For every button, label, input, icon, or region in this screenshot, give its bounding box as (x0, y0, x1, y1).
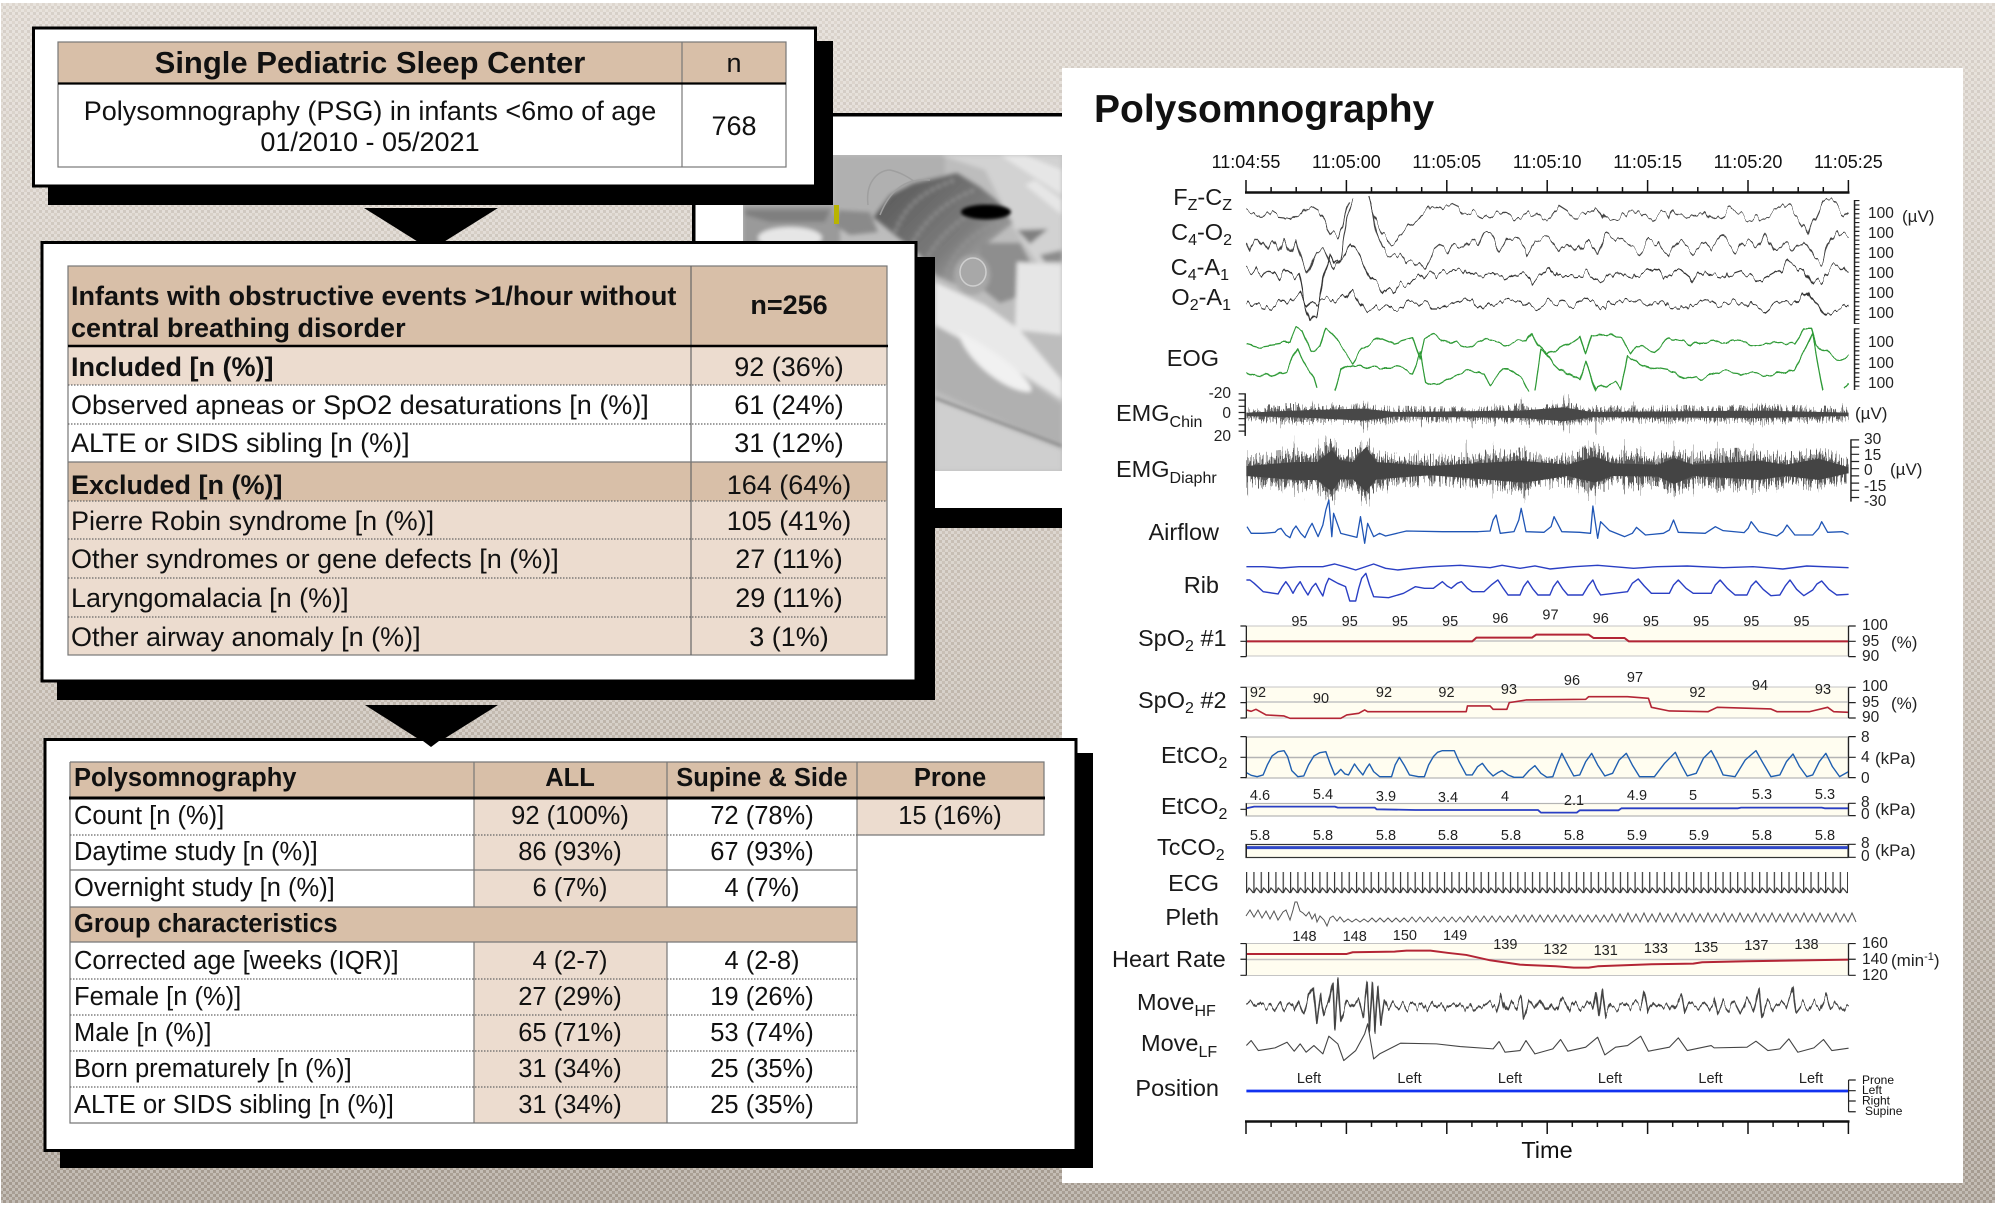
channel labels: EEG: Z (1188, 197, 1198, 214)
row: other airway anomaly: 3 (1%) (749, 622, 829, 652)
channel: EtCO2 trend: 3.4 (1438, 790, 1458, 806)
channel: Heart Rate: 160 (1862, 935, 1888, 952)
row: observed apneas: Observed apneas or SpO2 desaturations [n (%)] (71, 390, 649, 420)
trace: Fz-Cz recovery (1369, 200, 1849, 243)
channel: TcCO2 trend: 5.9 (1627, 828, 1647, 844)
channel: EtCO2 trend: (kPa) (1875, 800, 1916, 819)
channel: EtCO2 trend: 4.9 (1627, 788, 1647, 804)
channel: Position: Position (1135, 1075, 1219, 1101)
table header (74, 764, 986, 792)
row: laryngomalacia (71, 583, 843, 613)
channel: SpO2 #1: 96 (1593, 611, 1609, 627)
channel: SpO2 #1: 95 (1643, 614, 1659, 630)
channel: EtCO2 trend (1161, 787, 1916, 823)
channel: EMG chin label and scale: Chin (1170, 414, 1202, 431)
channel labels: EEG (1171, 184, 1232, 314)
trace: EtCO2 waveform (1246, 751, 1849, 777)
row: male: Male [n (%)] (74, 1019, 211, 1047)
channel: EMG chin label and scale: -20 (1209, 385, 1231, 402)
trace: C4-A1 (1246, 245, 1849, 320)
traces: heart rate, movement, position (1240, 944, 1856, 1112)
trace: EtCO2 trend (1246, 807, 1849, 813)
channel: SpO2 #1: 2 (1185, 638, 1194, 655)
row: male: 65 (71%) (518, 1019, 622, 1047)
table body: 768 (711, 111, 757, 141)
panel: polysomnography results (45, 735, 1093, 1168)
channel: SpO2 #2: 95 (1862, 694, 1879, 711)
channel: TcCO2 trend: 5.8 (1752, 828, 1772, 844)
scale: EEG and EOG ticks (1242, 200, 1857, 502)
channel: EMG chin label and scale: EMG (1116, 400, 1170, 426)
row: corrected age (74, 947, 800, 975)
channel: ECG (1168, 870, 1848, 896)
panels: SpO2, EtCO2, TcCO2 backgrounds (1246, 626, 1848, 976)
trace: EOG lower right (1535, 333, 1823, 390)
channel: SpO2 #2 (1138, 670, 1917, 726)
channel: EtCO2 trend: 8 (1861, 794, 1870, 811)
channel: TcCO2 trend: 5.8 (1250, 828, 1270, 844)
channel: Move labels: LF (1198, 1044, 1217, 1061)
row: observed apneas: 61 (24%) (734, 390, 844, 420)
trace: EOG end (1844, 383, 1849, 388)
channel: Heart Rate (1112, 928, 1940, 984)
channel: Heart Rate: 148 (1343, 929, 1367, 945)
row: ALTE or SIDS sibling: ALTE or SIDS sibling [n (%)] (71, 428, 410, 458)
channel: SpO2 #1: 95 (1862, 633, 1879, 650)
trace group: EOG channels (1246, 328, 1849, 390)
channel: EtCO2 waveform: EtCO (1161, 742, 1218, 768)
channel: Heart Rate: 149 (1443, 928, 1467, 944)
row: male (74, 1019, 814, 1047)
time axis: top: 11:05:10 (1513, 152, 1582, 172)
channel: EtCO2 trend: 0 (1861, 806, 1870, 823)
scale labels: EEG microvolts: 100 (1868, 205, 1894, 222)
channel: SpO2 #2: 92 (1438, 685, 1455, 701)
trace: EOG upper (1246, 328, 1849, 362)
channel: Airflow and Rib labels (1148, 519, 1220, 598)
row: excluded: Excluded [n (%)] (71, 470, 283, 500)
trace: C4-O2 (1246, 200, 1353, 275)
channel: TcCO2 trend: 5.8 (1564, 828, 1584, 844)
table cell fills (68, 266, 887, 655)
channel: SpO2 #1: 97 (1542, 608, 1559, 624)
row: male: 53 (74%) (710, 1019, 814, 1047)
row: other airway anomaly: Other airway anomaly [n (%)] (71, 622, 421, 652)
channel: Position: Prone (1862, 1073, 1894, 1087)
channel: Position: Left (1297, 1071, 1321, 1087)
channel: SpO2 #1: #1 (1194, 625, 1227, 651)
channel: Position: Left (1698, 1071, 1723, 1087)
channel: EtCO2 trend: 5.3 (1815, 787, 1835, 803)
channel: Position (1135, 1071, 1903, 1118)
channel labels: EEG: -A (1199, 284, 1222, 310)
channel: Heart Rate: 139 (1493, 937, 1517, 953)
trace: Airflow (1247, 500, 1849, 543)
panel: single pediatric sleep center (34, 28, 833, 205)
channel: EMG diaphragm label and scale (1116, 431, 1922, 510)
scale labels: EEG microvolts: 100 (1868, 285, 1894, 302)
row: overnight study: Overnight study [n (%)] (74, 874, 335, 902)
channel labels: EEG: F (1173, 184, 1188, 210)
channel: TcCO2 trend: 8 (1861, 835, 1870, 852)
channel: EtCO2 trend: 5 (1689, 788, 1697, 804)
channel: SpO2 #2: (%) (1891, 694, 1917, 713)
row: ALTE or SIDS sibling: 31 (12%) (734, 428, 844, 458)
table body: 01/2010 - 05/2021 (260, 127, 480, 157)
time axis: top: 11:05:20 (1714, 152, 1782, 172)
channel: Heart Rate: -1 (1924, 951, 1934, 963)
channel: SpO2 #1: 95 (1392, 614, 1408, 630)
channel labels: EEG: -O (1197, 219, 1223, 245)
channel: SpO2 #1: SpO (1138, 625, 1185, 651)
channel: EtCO2 trend: 4 (1501, 789, 1509, 805)
row: included: 92 (36%) (734, 352, 844, 382)
scale labels: EEG microvolts: 100 (1868, 245, 1894, 262)
row: ALTE or SIDS sibling (74, 1091, 814, 1119)
row: daytime study: Daytime study [n (%)] (74, 838, 318, 866)
row: overnight study: 6 (7%) (532, 874, 608, 902)
row: group characteristics: Group characteristics (74, 910, 338, 938)
channel: EMG diaphragm label and scale: 0 (1864, 462, 1873, 479)
channel: Heart Rate: 131 (1594, 943, 1618, 959)
channel labels: EEG: O (1171, 284, 1190, 310)
channel: EtCO2 waveform: 0 (1861, 770, 1870, 787)
trace: movement low frequency (1246, 1024, 1849, 1061)
channel labels: EEG: 1 (1220, 267, 1229, 284)
scale ticks: heart rate and position (1240, 944, 1856, 1112)
channel: Heart Rate: 135 (1694, 940, 1718, 956)
table header: n (726, 48, 742, 78)
row: Pierre Robin syndrome (71, 506, 851, 536)
channel: Position: Right (1862, 1094, 1891, 1108)
panel: slide with infant photograph (692, 113, 1062, 528)
channel: EOG label and scale: 100 (1868, 334, 1894, 351)
channel: EtCO2 waveform (1161, 729, 1916, 787)
time axis: top: 11:04:55 (1212, 152, 1280, 172)
channel: SpO2 #2: #2 (1194, 687, 1227, 713)
row: corrected age: 4 (2-8) (724, 947, 800, 975)
channel: TcCO2 trend: 5.8 (1376, 828, 1396, 844)
channel: EMG diaphragm label and scale: (µV) (1890, 460, 1922, 479)
table header: central breathing disorder (71, 313, 406, 343)
channel: Heart Rate: Heart Rate (1112, 946, 1226, 972)
channel: EOG label and scale: 100 (1868, 355, 1894, 372)
channel: EMG diaphragm label and scale: EMG (1116, 456, 1170, 482)
channel: EMG diaphragm label and scale: Diaphr (1170, 470, 1217, 487)
channel: EOG label and scale: EOG (1167, 345, 1219, 371)
row: overnight study (74, 874, 800, 902)
table lines (68, 266, 888, 655)
trace: movement high frequency (1246, 980, 1849, 1030)
channel: EtCO2 waveform: (kPa) (1875, 749, 1916, 768)
channel: TcCO2 trend: (kPa) (1875, 841, 1916, 860)
row: ALTE or SIDS sibling: 31 (34%) (518, 1091, 622, 1119)
channel: Heart Rate: 133 (1644, 941, 1668, 957)
channel: Position: Left (1397, 1071, 1422, 1087)
row: count: 15 (16%) (898, 802, 1002, 830)
channel: Heart Rate: ) (1934, 951, 1940, 970)
row: ALTE or SIDS sibling: 25 (35%) (710, 1091, 814, 1119)
channel: SpO2 #1: (%) (1891, 633, 1917, 652)
channel labels: EEG: 2 (1190, 297, 1199, 314)
trace: Fz-Cz (1246, 200, 1350, 235)
channel: SpO2 #1 (1138, 608, 1917, 665)
channel: EtCO2 trend: 3.9 (1376, 789, 1396, 805)
channel labels: EEG: 4 (1188, 267, 1197, 284)
row: Pierre Robin syndrome: Pierre Robin syndrome [n (%)] (71, 506, 434, 536)
trace: EMG chin (1246, 397, 1849, 431)
arrow: first to second step (364, 208, 498, 250)
channel: TcCO2 trend: 2 (1216, 847, 1225, 864)
channel: SpO2 #2: SpO (1138, 687, 1185, 713)
trace: body position (1246, 1090, 1849, 1092)
row: born prematurely: 25 (35%) (710, 1055, 814, 1083)
channel: Move labels: Move (1137, 989, 1194, 1015)
table body: Polysomnography (PSG) in infants <6mo of age (84, 96, 656, 126)
channel labels: EEG: C (1171, 219, 1188, 245)
trace: EOG lower middle (1335, 353, 1529, 390)
channel labels: EEG: C (1171, 254, 1188, 280)
trace: C4-O2 recovery (1371, 203, 1849, 267)
row: laryngomalacia: Laryngomalacia [n (%)] (71, 583, 349, 613)
channel labels: EEG: 1 (1222, 297, 1231, 314)
channel: TcCO2 trend: 5.8 (1438, 828, 1458, 844)
channel: EtCO2 trend: 5.3 (1752, 787, 1772, 803)
channel: SpO2 #1: 95 (1291, 614, 1308, 630)
row: count: Count [n (%)] (74, 802, 224, 830)
row: included: Included [n (%)] (71, 352, 273, 382)
channel: SpO2 #1: 90 (1862, 648, 1880, 665)
channel: SpO2 #2: 93 (1501, 682, 1517, 698)
channel: Heart Rate: 137 (1744, 938, 1768, 954)
trace: TcCO2 trend (1246, 846, 1849, 849)
channel: Heart Rate: 132 (1543, 942, 1568, 958)
row: corrected age: 4 (2-7) (532, 947, 608, 975)
table cell fills (70, 762, 1044, 1123)
table body (58, 42, 786, 167)
row: daytime study: 86 (93%) (518, 838, 622, 866)
channel: EMG chin label and scale: 0 (1222, 405, 1231, 422)
scale labels: EEG microvolts: (µV) (1902, 207, 1934, 226)
scale labels: EEG microvolts: 100 (1868, 225, 1894, 242)
channel: Move labels: Move (1141, 1030, 1198, 1056)
table header (58, 42, 786, 84)
channel: EOG label and scale (1167, 334, 1894, 392)
row: count (74, 802, 1002, 830)
channel: Position: Left (1598, 1071, 1622, 1087)
channel: TcCO2 trend: 5.8 (1313, 828, 1333, 844)
row: female: Female [n (%)] (74, 983, 241, 1011)
time axis: top: 11:05:05 (1412, 152, 1481, 172)
channel: Move labels (1137, 989, 1217, 1061)
channel: Pleth (1165, 902, 1856, 930)
table lines (69, 762, 1045, 1123)
channel: SpO2 #2: 92 (1250, 685, 1266, 701)
channel: Position: Left (1498, 1071, 1522, 1087)
channel labels: EEG: Z (1222, 197, 1232, 214)
channel: EMG diaphragm label and scale: -15 (1864, 478, 1886, 495)
row: Pierre Robin syndrome: 105 (41%) (727, 506, 851, 536)
channel: Heart Rate: 148 (1292, 929, 1317, 945)
channel: SpO2 #2: 2 (1185, 700, 1194, 717)
photo: infant with polysomnography electrodes (743, 155, 1062, 471)
channel: Airflow and Rib labels: Airflow (1148, 519, 1220, 545)
channel: Heart Rate: 140 (1862, 951, 1888, 968)
channel: EMG chin label and scale: (µV) (1855, 404, 1887, 423)
row: other syndromes: Other syndromes or gene defects [n (%)] (71, 544, 559, 574)
trace: EMG diaphragm (1246, 439, 1849, 502)
row: born prematurely: 31 (34%) (518, 1055, 622, 1083)
channel: SpO2 #1: 95 (1442, 614, 1458, 630)
channel: EtCO2 waveform: 2 (1218, 755, 1227, 772)
panel: polysomnography recording (1062, 68, 1963, 1183)
channel: Position: Supine (1865, 1104, 1903, 1118)
row: excluded: 164 (64%) (727, 470, 851, 500)
row: count: 92 (100%) (511, 802, 629, 830)
channel: SpO2 #1: 95 (1793, 614, 1810, 630)
row: female: 19 (26%) (710, 983, 814, 1011)
channel: TcCO2 trend (1157, 828, 1916, 865)
channel labels: EEG: 4 (1188, 232, 1197, 249)
channel: SpO2 #2: 90 (1313, 691, 1329, 707)
scale labels: EEG microvolts: 100 (1868, 265, 1894, 282)
channel: SpO2 #1: 95 (1743, 614, 1759, 630)
heading: Polysomnography: Polysomnography (1094, 88, 1435, 131)
channel: SpO2 #2: 92 (1689, 685, 1706, 701)
channel: SpO2 #2: 94 (1752, 678, 1768, 694)
channel: EMG chin label and scale (1116, 385, 1887, 445)
table header (71, 281, 828, 343)
channel: TcCO2 trend: 5.8 (1501, 828, 1521, 844)
row: female: 27 (29%) (518, 983, 622, 1011)
traces: EEG, EOG and EMG (1242, 200, 1857, 502)
channel: EMG chin label and scale: 20 (1214, 428, 1231, 445)
channel: TcCO2 trend: TcCO (1157, 834, 1216, 860)
trace group: EEG channels with fine noise (1246, 200, 1849, 320)
row: daytime study: 67 (93%) (710, 838, 814, 866)
trace: SpO2 #2 (1246, 697, 1849, 718)
trace: Rib upper (1246, 564, 1849, 570)
scale ticks: saturation and CO2 (1240, 626, 1856, 857)
channel: Pleth: Pleth (1165, 904, 1219, 930)
table header: Single Pediatric Sleep Center (155, 45, 585, 80)
channel: SpO2 #1: 95 (1693, 614, 1709, 630)
panel: infants with obstructive events (42, 242, 935, 700)
table header: ALL (545, 764, 595, 792)
channel: SpO2 #2: 100 (1862, 678, 1888, 695)
time axis: bottom (1245, 1122, 1850, 1163)
channel: SpO2 #2: 97 (1627, 670, 1643, 686)
channel labels: EEG: 2 (1223, 232, 1232, 249)
trace: EOG lower (1246, 348, 1317, 390)
time axis: top (1212, 152, 1883, 192)
channel: TcCO2 trend: 5.9 (1689, 828, 1709, 844)
channel: Heart Rate: 120 (1862, 967, 1888, 984)
row: corrected age: Corrected age [weeks (IQR)] (74, 947, 399, 975)
channel: EtCO2 trend: 2.1 (1564, 793, 1584, 809)
table header: n=256 (750, 290, 828, 320)
channel: Position: Left (1799, 1071, 1823, 1087)
row: born prematurely (74, 1055, 814, 1083)
channel: SpO2 #2: 90 (1862, 709, 1880, 726)
channel: Move labels: HF (1194, 1003, 1216, 1020)
channel: EtCO2 trend: 5.4 (1313, 787, 1333, 803)
channel labels: EEG: -A (1197, 254, 1220, 280)
row: overnight study: 4 (7%) (724, 874, 800, 902)
channel: Heart Rate: 150 (1393, 928, 1417, 944)
time axis: top: 11:05:15 (1613, 152, 1682, 172)
channel: SpO2 #2: 93 (1815, 682, 1831, 698)
channel: Airflow and Rib labels: Rib (1184, 572, 1219, 598)
channel: Heart Rate: 138 (1794, 937, 1819, 953)
channel: EMG diaphragm label and scale: -30 (1864, 493, 1887, 510)
channel: ECG: ECG (1168, 870, 1219, 896)
trace: heart rate (1246, 951, 1849, 968)
channel: EtCO2 trend: 2 (1218, 806, 1227, 823)
row: other syndromes (71, 544, 843, 574)
table header: Infants with obstructive events >1/hour without (71, 281, 676, 311)
channel: EOG label and scale: 100 (1868, 375, 1894, 392)
channel: SpO2 #2: 96 (1564, 673, 1580, 689)
row: ALTE or SIDS sibling (71, 428, 844, 458)
trace: SpO2 #1 (1246, 635, 1849, 641)
channel: Heart Rate: (min (1891, 951, 1924, 970)
arrow overlap tip (415, 735, 447, 747)
row: other airway anomaly (71, 622, 829, 652)
table header: Supine & Side (676, 764, 848, 792)
row: female (74, 983, 814, 1011)
trace: Rib lower (1246, 573, 1849, 601)
table header: Prone (914, 764, 986, 792)
channel labels: EEG: -C (1197, 184, 1222, 210)
time axis: top: 11:05:25 (1814, 152, 1883, 172)
scale labels: EEG microvolts (1868, 205, 1934, 322)
row: ALTE or SIDS sibling: ALTE or SIDS sibling [n (%)] (74, 1091, 394, 1119)
channel: TcCO2 trend: 0 (1861, 848, 1870, 865)
channel: SpO2 #1: 96 (1492, 611, 1508, 627)
channel: SpO2 #2: 92 (1376, 685, 1392, 701)
channel: TcCO2 trend: 5.8 (1815, 828, 1835, 844)
row: count: 72 (78%) (710, 802, 814, 830)
channel: EtCO2 trend: EtCO (1161, 793, 1218, 819)
row: excluded (71, 470, 851, 500)
time axis: top: 11:05:00 (1312, 152, 1381, 172)
scale labels: EEG microvolts: 100 (1868, 305, 1894, 322)
channel: SpO2 #1: 100 (1862, 617, 1888, 634)
row: laryngomalacia: 29 (11%) (735, 583, 843, 613)
channel: EtCO2 waveform: 4 (1861, 749, 1870, 766)
row: included (71, 352, 844, 382)
arrow: second to third step (365, 705, 498, 747)
channel: Position: Left (1862, 1083, 1883, 1097)
row: daytime study (74, 838, 814, 866)
channel: EtCO2 waveform: 8 (1861, 729, 1870, 746)
traces: respiration, saturation, CO2 (1240, 500, 1856, 857)
channel: EMG diaphragm label and scale: 15 (1864, 447, 1881, 464)
table header: Polysomnography (74, 764, 297, 792)
row: other syndromes: 27 (11%) (735, 544, 843, 574)
trace: O2-A1 (1246, 290, 1849, 317)
row: born prematurely: Born prematurely [n (%)] (74, 1055, 352, 1083)
time axis: bottom: Time (1521, 1137, 1573, 1163)
channel: SpO2 #1: 95 (1342, 614, 1358, 630)
channel: EtCO2 trend: 4.6 (1250, 788, 1270, 804)
channel: EMG diaphragm label and scale: 30 (1864, 431, 1882, 448)
